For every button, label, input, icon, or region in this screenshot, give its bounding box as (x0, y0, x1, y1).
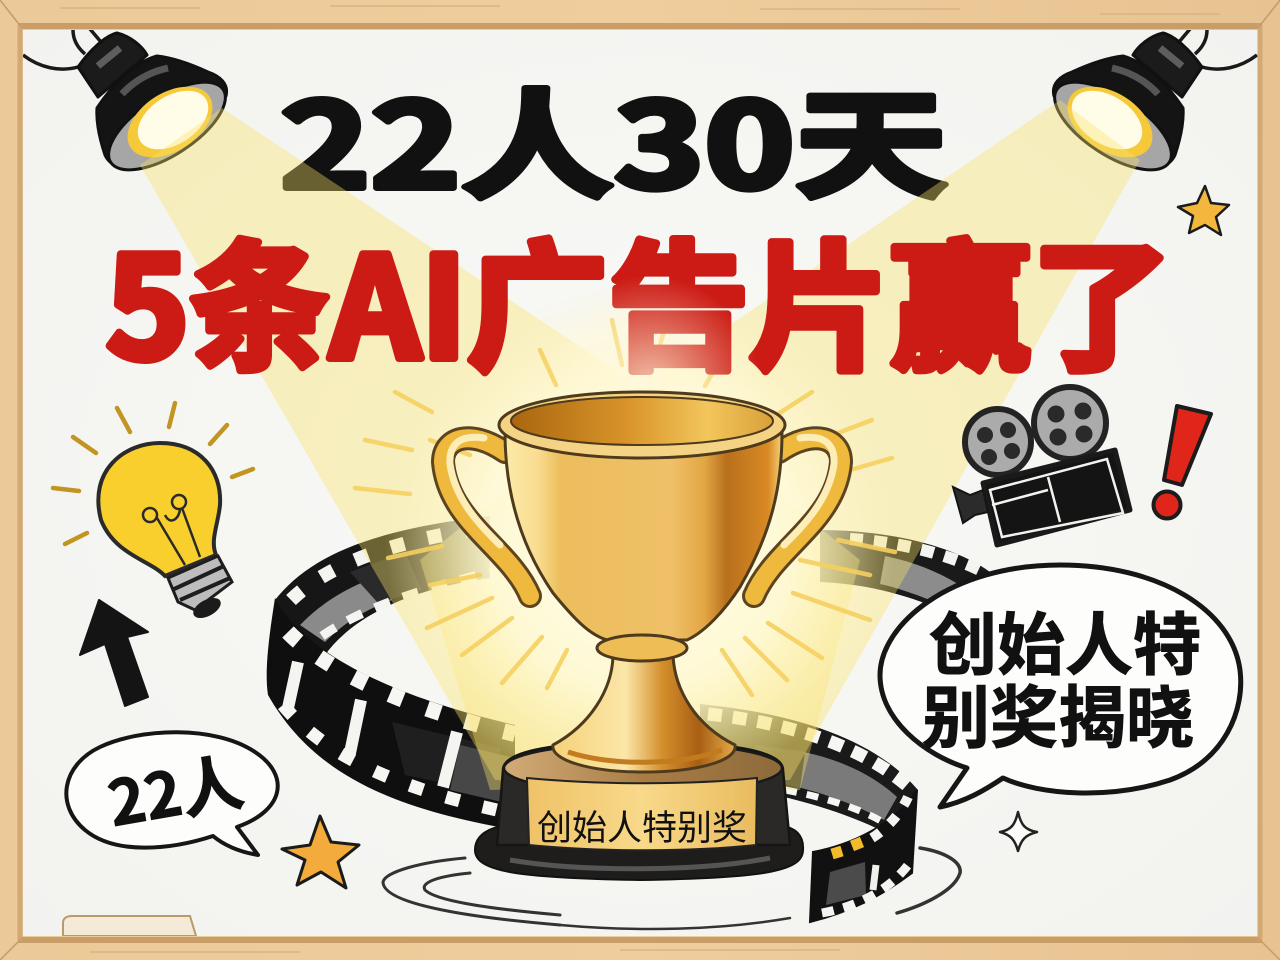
trophy foot (475, 826, 803, 880)
title glow wash (540, 275, 760, 495)
trophy handles (443, 437, 841, 596)
spotlight left (23, 29, 239, 187)
star bottom (282, 816, 359, 888)
film back left (275, 516, 490, 655)
trophy cup (505, 432, 782, 640)
spotlight right (1041, 29, 1257, 187)
light rays (355, 320, 895, 695)
bubble text line 2: 别奖揭晓 (922, 663, 1194, 762)
speech bubble 22人 (66, 732, 278, 855)
trophy glow (385, 285, 895, 795)
base swirls (383, 848, 960, 929)
spotlight beams (140, 100, 1140, 790)
bulb rays (53, 403, 253, 544)
trophy base (497, 742, 790, 845)
film strip ribbon (267, 516, 990, 922)
chalk tray item (63, 916, 196, 936)
film tail fold (810, 790, 917, 922)
speech bubble founder award (880, 565, 1241, 807)
exclamation mark (1154, 406, 1211, 518)
trophy stem (553, 656, 735, 772)
camera reel right (1034, 387, 1106, 459)
film front left (267, 598, 515, 830)
trophy (443, 392, 841, 880)
bubble text: 22人 (100, 732, 249, 844)
camera reel left (965, 409, 1031, 475)
camera body (983, 450, 1130, 545)
plaque label: 创始人特别奖 (537, 809, 747, 848)
arrow up (80, 600, 148, 706)
bulb glass (98, 443, 220, 576)
lightbulb icon (53, 403, 253, 622)
title line 1: 22人30天 (280, 51, 948, 222)
trophy collar (597, 635, 687, 661)
star top right (1178, 186, 1229, 235)
title line 2: 5条AI广告片赢了 (106, 197, 1172, 399)
movie camera icon (953, 387, 1130, 545)
bubble text line 1: 创始人特 (929, 590, 1201, 689)
beam right (420, 100, 1140, 790)
film front right (700, 704, 918, 845)
beam left (140, 108, 860, 790)
sparkle (1000, 812, 1037, 851)
film back right (820, 530, 990, 614)
bulb filament (157, 508, 200, 565)
trophy rim (499, 392, 785, 458)
award plaque (527, 778, 757, 850)
camera lens (953, 487, 988, 523)
bulb screw (168, 556, 232, 610)
